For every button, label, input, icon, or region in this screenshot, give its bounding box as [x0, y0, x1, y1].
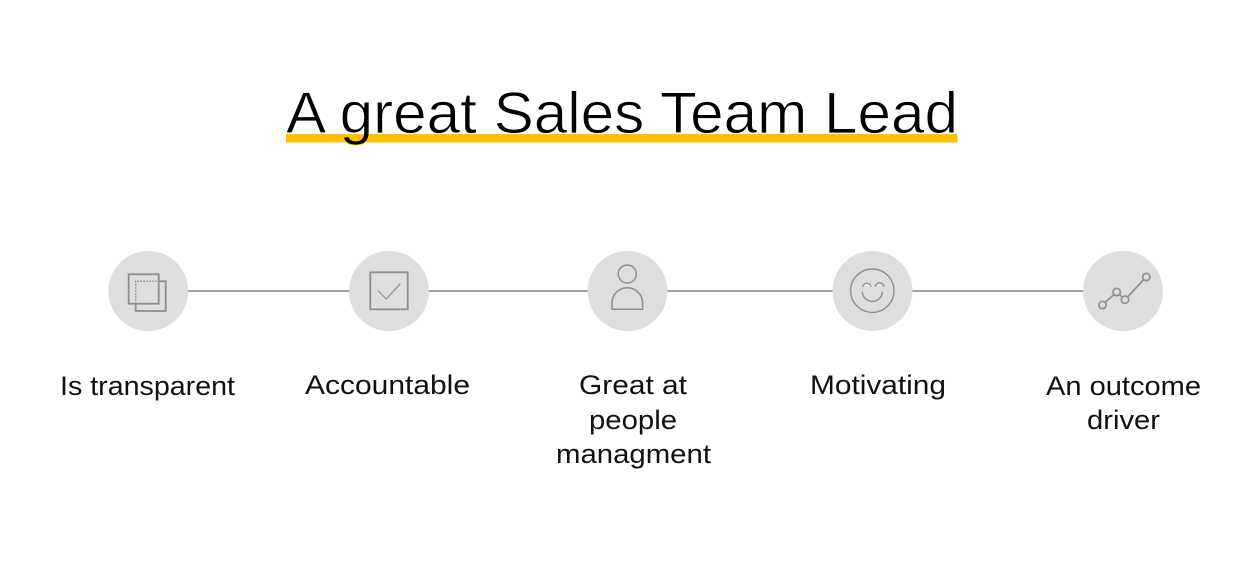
- step 4: motivating: [810, 251, 946, 400]
- title with yellow underline: A great Sales Team Lead: [286, 81, 958, 146]
- step 1: transparent: [60, 251, 236, 401]
- step 3: people management: [556, 251, 712, 469]
- label: Motivating: Motivating: [810, 370, 946, 400]
- icon: line chart: [1083, 251, 1163, 331]
- connecting timeline line: [148, 290, 1123, 292]
- label: Great at people managment: managment: [556, 439, 712, 469]
- label: An outcome driver: [1046, 371, 1201, 435]
- icon: smiley face: [832, 251, 912, 331]
- label: Great at people managment: Great at: [579, 370, 688, 400]
- label: Great at people managment: people: [589, 405, 677, 435]
- title with yellow underline: A great Sales Team Lead: [286, 81, 958, 146]
- label: Is transparent: Is transparent: [60, 371, 236, 401]
- label: An outcome driver: An outcome: [1046, 371, 1201, 401]
- step 5: outcome driver: [1046, 251, 1201, 435]
- icon: overlapping squares: [108, 251, 188, 331]
- icon: checkbox: [349, 251, 429, 331]
- label: Great at people managment: [556, 370, 712, 469]
- step 2: accountable: [305, 251, 470, 400]
- label: Accountable: Accountable: [305, 370, 470, 400]
- icon: person: [588, 251, 668, 331]
- label: An outcome driver: driver: [1087, 405, 1160, 435]
